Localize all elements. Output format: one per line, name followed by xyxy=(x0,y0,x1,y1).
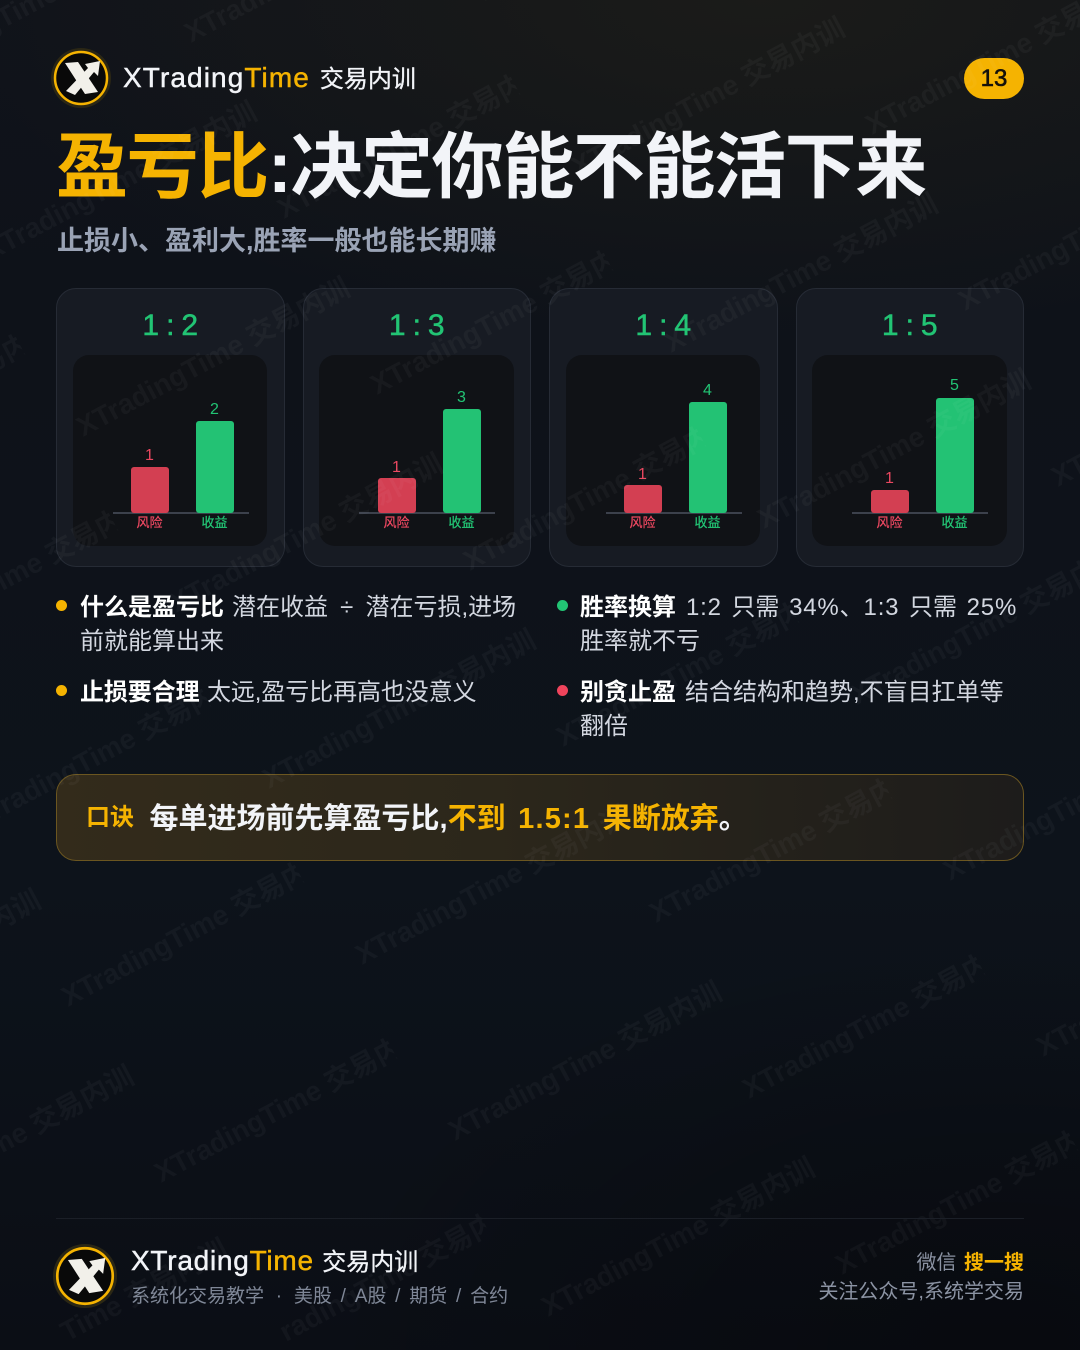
watermark: radingTime 交易内训 xyxy=(274,1193,527,1347)
bar chart: 1 xyxy=(885,470,894,486)
panel: ratio 1:3 xyxy=(302,288,531,567)
bar chart: 风险 xyxy=(876,515,902,530)
watermark: XTradingTime 交易内训 xyxy=(752,364,1036,534)
watermark: XTradingTime 交易内训 xyxy=(458,406,742,576)
bar chart xyxy=(319,354,514,546)
watermark: XTradingTime 交易内训 xyxy=(56,842,340,1012)
bar chart: 4 xyxy=(703,382,712,398)
bar chart xyxy=(812,354,1006,546)
panel: ratio 1:4 xyxy=(549,288,778,567)
bar chart: 1 xyxy=(145,446,154,464)
watermark: XTradingTime 交易内训 xyxy=(71,272,355,442)
brand name: XTradingTime 交易内训 xyxy=(123,62,416,93)
watermark: XTradingTime 交易内训 xyxy=(272,54,556,224)
bar chart: 收益 xyxy=(941,515,968,530)
ratio heading: 1:5 xyxy=(882,309,945,342)
bullet: win rate: 胜率换算 1:2 只需 34%、1:3 只需 25% xyxy=(580,594,1017,620)
bar chart: 收益 xyxy=(448,515,474,530)
panel: ratio 1:5 xyxy=(796,288,1024,567)
footer logo xyxy=(53,1244,117,1308)
bullet: what is the ratio xyxy=(56,594,516,654)
bar chart: 风险 xyxy=(629,515,656,530)
bar chart xyxy=(72,354,267,546)
footer divider xyxy=(56,1218,1024,1219)
bar chart: 3 xyxy=(457,388,466,406)
watermark: XTradingTime 交易内训 xyxy=(350,800,634,970)
page number badge: 13 xyxy=(981,65,1007,92)
bar chart: 5 xyxy=(950,376,959,394)
bar chart: 收益 xyxy=(201,515,228,530)
ratio heading: 1:4 xyxy=(635,309,698,342)
page number badge xyxy=(964,58,1024,99)
watermark: XTradingTime 交易内训 xyxy=(257,624,541,794)
panel: ratio 1:2 xyxy=(56,288,284,567)
bullet: win rate xyxy=(557,594,1017,654)
bar chart: 风险 xyxy=(136,515,162,530)
watermark: XTradingTime 交易内训 xyxy=(365,230,649,400)
watermark: XTradingTime 交易内训 xyxy=(443,976,727,1146)
bullet: what is the ratio: 什么是盈亏比 潜在收益 ÷ 潜在亏损,进场 xyxy=(80,594,516,620)
callout xyxy=(56,774,1024,861)
watermark: Time 交易内训 xyxy=(55,1233,233,1347)
ratio heading: 1:3 xyxy=(389,309,452,342)
callout label: 口诀 xyxy=(86,804,134,831)
watermark: XTradingTime 交易内训 xyxy=(566,12,850,182)
subtitle: 止损小、盈利大,胜率一般也能长期赚 xyxy=(57,226,497,256)
bullet: take profit: 别贪止盈 结合结构和趋势,不盲目扛单等 xyxy=(580,678,1004,706)
title: 盈亏比:决定你能不能活下来 xyxy=(56,128,926,208)
bar chart xyxy=(566,354,760,546)
watermark: XTradingTime 交易内训 xyxy=(659,188,943,358)
bullet: take profit xyxy=(557,678,1004,740)
bullet: stop loss: 止损要合理 太远,盈亏比再高也没意义 xyxy=(80,678,476,706)
bullet: win rate: 胜率就不亏 xyxy=(580,628,700,654)
watermark: XTradingTime 交易内训 xyxy=(536,1152,820,1322)
watermark: XTradingTime 交易内训 xyxy=(737,934,1021,1104)
ratio heading: 1:2 xyxy=(142,309,205,342)
footer follow text: 关注公众号,系统学交易 xyxy=(818,1280,1024,1302)
bar chart: 1 xyxy=(638,466,647,482)
bullet: what is the ratio: 前就能算出来 xyxy=(80,628,224,654)
watermark xyxy=(144,60,986,824)
header logo xyxy=(51,48,111,108)
callout text: 每单进场前先算盈亏比,不到 1.5:1 果断放弃。 xyxy=(150,803,748,835)
footer tagline: 系统化交易教学 · 美股 / A股 / 期货 / 合约 xyxy=(131,1286,508,1307)
watermark: XTradingTime 交易内训 xyxy=(149,1018,433,1188)
bullet: take profit: 翻倍 xyxy=(580,712,628,740)
bar chart: 2 xyxy=(210,400,219,418)
bar chart: 1 xyxy=(392,458,401,476)
footer wechat search: 微信 搜一搜 xyxy=(916,1252,1024,1274)
watermark: XTradingTime 交易内训 xyxy=(644,758,928,928)
footer brand name: XTradingTime 交易内训 xyxy=(131,1245,418,1276)
bar chart: 收益 xyxy=(694,515,720,530)
watermark: XTradingTime 交易内训 xyxy=(551,582,835,752)
watermark: XTradingTime 交易内训 xyxy=(164,448,448,618)
bar chart: 风险 xyxy=(383,515,410,530)
